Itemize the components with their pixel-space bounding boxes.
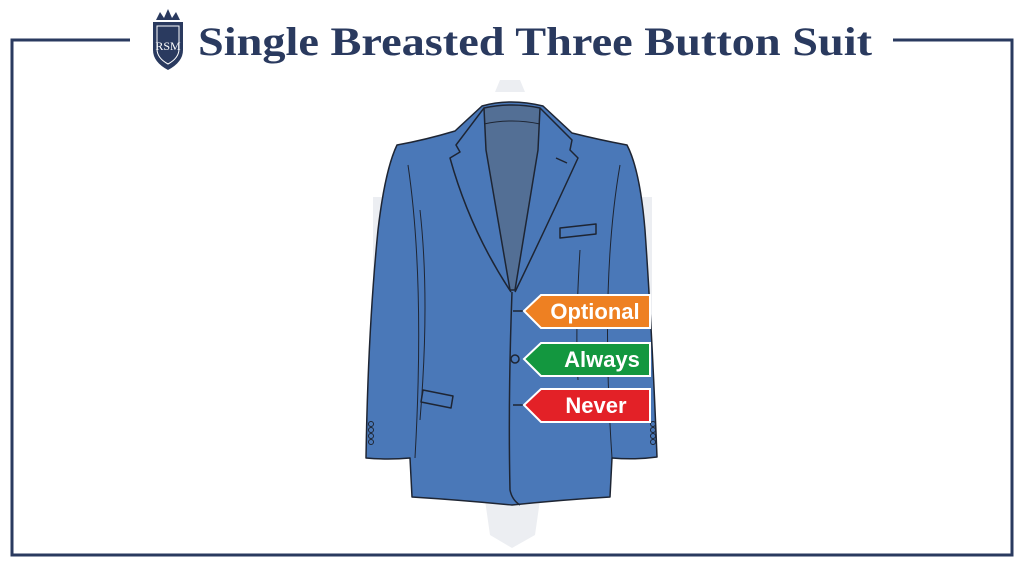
logo: crest — [153, 9, 183, 70]
label: Never — [524, 389, 650, 422]
title: Single Breasted Three Button Suit — [198, 19, 873, 64]
jacket — [366, 102, 657, 505]
label: Always: Always — [564, 347, 640, 372]
label: Never: Never — [565, 393, 627, 418]
logo: crest: RSM — [155, 39, 181, 53]
watermark — [373, 80, 652, 548]
label: Always — [524, 343, 650, 376]
label: Optional: Optional — [550, 299, 640, 324]
label: Optional — [524, 295, 650, 328]
